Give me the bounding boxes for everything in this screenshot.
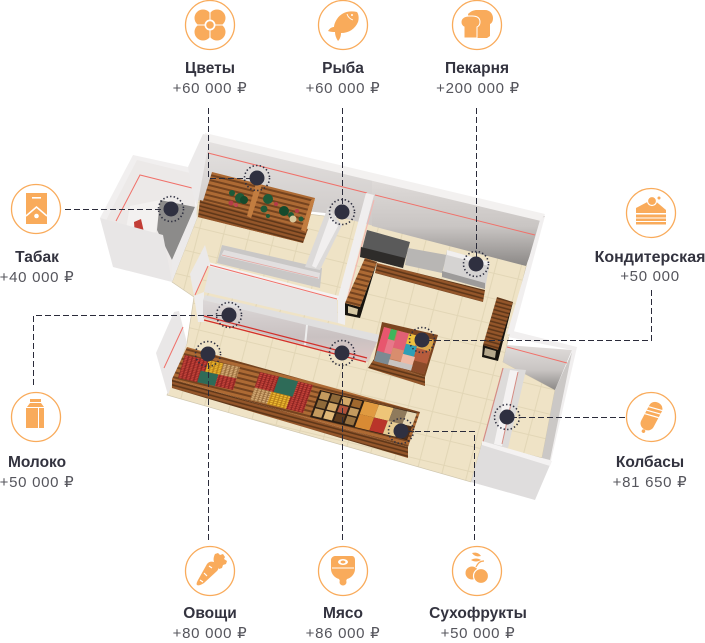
pin: sausages: [494, 404, 520, 430]
item: Пекарня: Пекарня: [445, 60, 509, 77]
item: Пекарня: +200 000 ₽: [436, 80, 520, 97]
pin: bakery: [464, 252, 488, 276]
pin: confectionery: [410, 328, 434, 352]
item: Молоко: +50 000 ₽: [0, 474, 74, 491]
back wall rim: [205, 133, 545, 221]
item: Овощи: +80 000 ₽: [173, 625, 247, 642]
icon: sausage: [626, 392, 676, 442]
pin: meat: [330, 340, 354, 366]
icon: milk carton: [12, 392, 60, 442]
item: Сухофрукты: +50 000 ₽: [441, 625, 515, 642]
item: Молоко: [0, 392, 74, 491]
item: Рыба: [306, 0, 380, 97]
floor: [167, 200, 555, 482]
vegetables group 2: [250, 372, 313, 413]
item: Колбасы: [613, 392, 687, 491]
dried fruit group: [310, 390, 417, 440]
bench 1: [345, 258, 377, 318]
item: Мясо: Мясо: [323, 605, 363, 622]
item: Табак: Табак: [15, 249, 59, 266]
bakery counter: [360, 230, 490, 302]
item: Колбасы: +81 650 ₽: [613, 474, 687, 491]
item: Сухофрукты: [429, 546, 527, 642]
icon: cigarette pack: [12, 184, 60, 234]
item: Овощи: Овощи: [183, 605, 237, 622]
icon: carrot: [186, 546, 234, 596]
item: Цветы: Цветы: [185, 60, 235, 77]
confectionery table: [368, 322, 438, 386]
item: Рыба: +60 000 ₽: [306, 80, 380, 97]
item: Цветы: +60 000 ₽: [173, 80, 247, 97]
icon: fish: [318, 0, 368, 50]
icon: flower: [186, 0, 234, 50]
plants: [228, 190, 304, 222]
pin: tobacco: [158, 196, 184, 222]
pin: flowers: [244, 166, 270, 190]
item: Молоко: Молоко: [8, 454, 66, 471]
tobacco room: [100, 134, 210, 282]
flower room fridges: [217, 207, 342, 288]
flower table: [198, 172, 315, 243]
item: Мясо: +86 000 ₽: [306, 625, 380, 642]
sausage room: [471, 331, 577, 500]
item: Колбасы: Колбасы: [616, 454, 684, 471]
store floor plan: [100, 133, 577, 500]
icon: bread: [452, 0, 502, 50]
back wall: flower room: [196, 135, 374, 226]
item: Цветы: [173, 0, 247, 97]
item: Табак: [0, 184, 74, 286]
item: Сухофрукты: Сухофрукты: [429, 605, 527, 622]
item: Пекарня: [436, 0, 520, 97]
connector lines: [34, 108, 652, 540]
icon: dried fruit: [452, 546, 502, 596]
icon: ham: [318, 546, 368, 596]
pin: fish: [330, 200, 354, 224]
right outer wall: [507, 216, 545, 335]
long produce table: [172, 347, 420, 458]
sweets display: [374, 327, 434, 374]
left short wall: [156, 311, 187, 395]
back wall: bakery room: [372, 178, 545, 266]
vegetables group 1: [178, 355, 240, 390]
item: Табак: +40 000 ₽: [0, 269, 74, 286]
pin: milk: [216, 302, 242, 328]
item: Мясо: [306, 546, 380, 642]
bench 2: [482, 297, 513, 361]
partition walls: [190, 193, 374, 325]
item: Рыба: Рыба: [322, 60, 364, 77]
pin: dried fruit: [388, 418, 414, 444]
refrigerated counter: [203, 295, 380, 362]
pin: vegetables: [196, 342, 220, 366]
item: Кондитерская: Кондитерская: [595, 249, 705, 266]
item: Кондитерская: [595, 188, 705, 285]
item: Овощи: [173, 546, 247, 642]
icon: cake slice: [626, 188, 676, 238]
item: Кондитерская: +50 000: [620, 268, 680, 285]
